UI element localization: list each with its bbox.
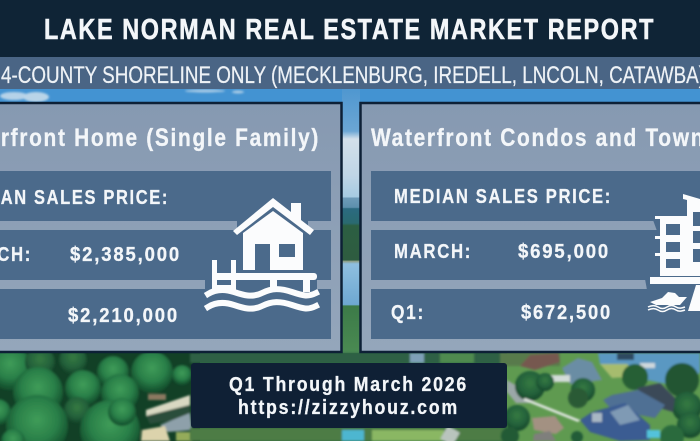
value: q1 price: $2,210,000: [68, 305, 179, 327]
value: march price: $2,385,000: [70, 244, 181, 266]
houses and lake on the right shore: [500, 352, 700, 441]
date and website box: [191, 363, 507, 428]
price rows background: [0, 171, 331, 339]
lawns under the date box: [190, 353, 510, 441]
label: march: MARCH:: [394, 241, 472, 263]
subtitle band: [0, 57, 700, 89]
background photo: lake, sky and shoreline: [0, 89, 700, 441]
panel: waterfront condos and townhomes: [360, 103, 700, 352]
date text: Q1 Through March 2026: [229, 374, 468, 396]
icon: condo building with boat: [648, 194, 700, 312]
title band: [0, 0, 700, 57]
value: q1 price: $672,500: [521, 302, 612, 324]
halo behind house icon: [205, 220, 317, 290]
panel: waterfront home: [0, 103, 342, 352]
price rows background: [371, 171, 700, 339]
website url: https://zizzyhouz.com: [238, 397, 459, 419]
trees on the left shore: [0, 346, 192, 441]
icon: lake house with dock: [208, 198, 317, 309]
value: march price: $695,000: [518, 241, 610, 263]
label: q1: Q1:: [391, 302, 425, 324]
halo behind building icon: [645, 220, 700, 290]
label: median sales price: MEDIAN SALES PRICE:: [394, 186, 612, 208]
